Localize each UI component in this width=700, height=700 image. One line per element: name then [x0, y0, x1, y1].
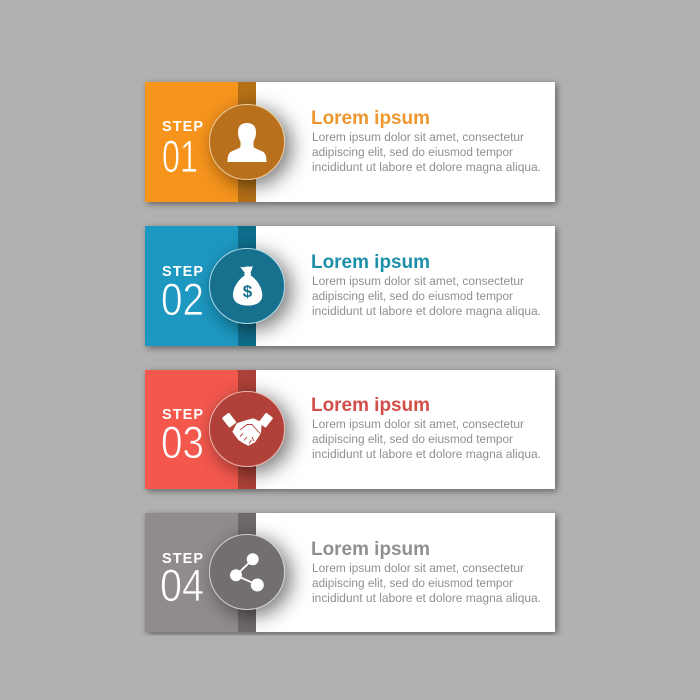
icon circle 2 — [210, 248, 284, 324]
body text 1: Lorem ipsum dolor sit amet, consectetur — [312, 130, 524, 144]
title 4: Lorem ipsum — [311, 539, 430, 560]
panel: step 3 — [145, 370, 555, 489]
card body: step 3 — [145, 370, 555, 489]
step number 4: 04 — [160, 560, 204, 611]
icon: handshake — [222, 413, 273, 446]
step number 1: 01 — [162, 131, 198, 182]
step label 1: STEP — [162, 119, 203, 135]
body text 2: adipiscing elit, sed do eiusmod tempor — [312, 289, 513, 303]
step number 2: 02 — [161, 274, 204, 325]
step label 4: STEP — [162, 551, 203, 567]
body text 2: incididunt ut labore et dolore magna aliqua. — [312, 304, 541, 318]
body text 3: Lorem ipsum dolor sit amet, consectetur — [312, 417, 524, 431]
body text 3: incididunt ut labore et dolore magna aliqua. — [312, 447, 541, 461]
step label 2: STEP — [162, 264, 203, 280]
card body: step 4 — [145, 513, 555, 632]
title 2: Lorem ipsum — [311, 252, 430, 273]
icon circle 3 — [210, 392, 284, 466]
icon: money bag — [233, 266, 262, 306]
step number 3: 03 — [161, 417, 204, 468]
panel: step 2 — [145, 226, 555, 346]
title 1: Lorem ipsum — [311, 108, 430, 129]
panel: step 4 — [145, 513, 555, 632]
body text 2: Lorem ipsum dolor sit amet, consectetur — [312, 274, 524, 288]
body text 4: Lorem ipsum dolor sit amet, consectetur — [312, 561, 524, 575]
body text 1 — [312, 130, 541, 174]
body text 4: incididunt ut labore et dolore magna aliqua. — [312, 591, 541, 605]
panel: step 1 — [145, 82, 555, 202]
body text 3: adipiscing elit, sed do eiusmod tempor — [312, 432, 513, 446]
icon circle 1 — [210, 104, 284, 180]
icon: money bag: $ — [243, 282, 253, 301]
body text 3 — [312, 417, 541, 461]
body text 1: incididunt ut labore et dolore magna aliqua. — [312, 160, 541, 174]
icon circle 4 — [210, 534, 284, 610]
body text 1: adipiscing elit, sed do eiusmod tempor — [312, 145, 513, 159]
icon: person — [228, 123, 266, 162]
body text 4: adipiscing elit, sed do eiusmod tempor — [312, 576, 513, 590]
card body: step 1 — [145, 82, 555, 202]
title 3: Lorem ipsum — [311, 395, 430, 416]
step label 3: STEP — [162, 407, 203, 423]
icon: share — [230, 553, 264, 592]
card body: step 2 — [145, 226, 555, 346]
body text 4 — [312, 561, 541, 605]
body text 2 — [312, 274, 541, 318]
